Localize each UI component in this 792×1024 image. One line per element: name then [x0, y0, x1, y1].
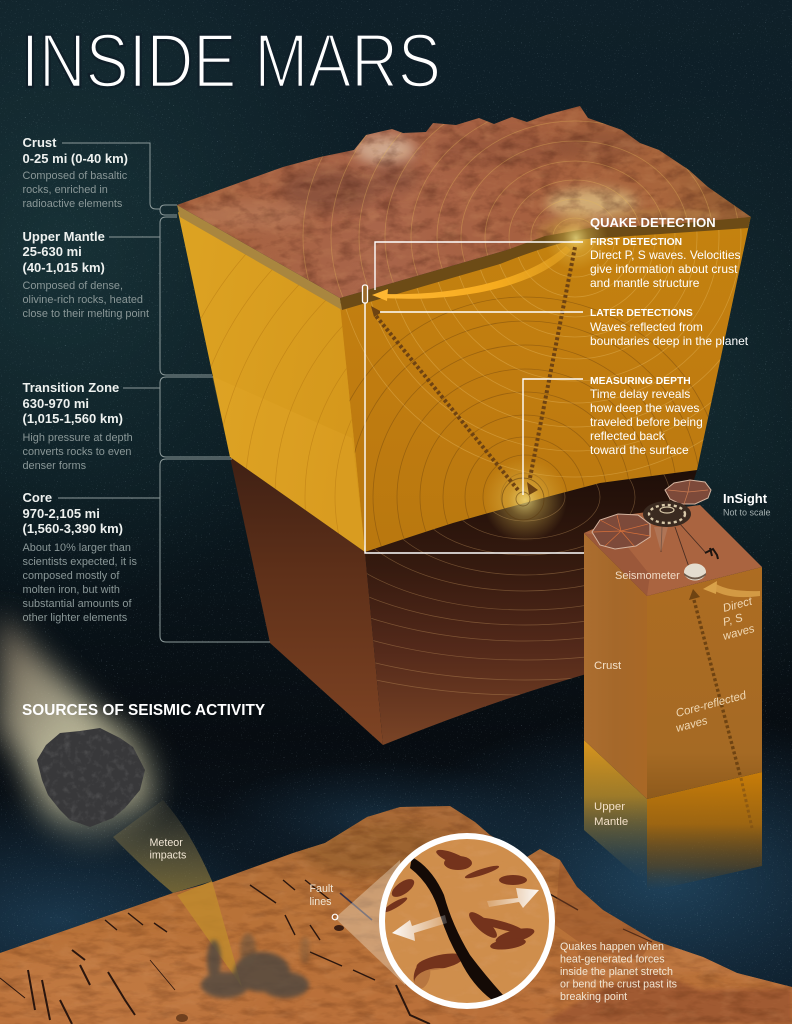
quake explanation text: or bend the crust past its	[560, 978, 677, 990]
title: INSIDE MARS	[21, 19, 441, 104]
transition zone label	[22, 377, 230, 472]
quake detection text: how deep the waves	[590, 401, 699, 415]
quake detection text: Waves reflected from	[590, 320, 703, 334]
upper mantle label: olivine-rich rocks, heated	[22, 294, 143, 306]
core label: Core	[22, 490, 52, 505]
core label: About 10% larger than	[22, 542, 131, 554]
white callout lines	[362, 242, 584, 553]
column: top surface	[584, 505, 762, 596]
column labels: Upper	[594, 801, 625, 813]
column: crust left face	[584, 533, 647, 799]
InSight labels	[723, 491, 771, 518]
dotted wave path: reflected	[376, 316, 518, 490]
column labels: P, S	[722, 612, 745, 629]
quake detection text: LATER DETECTIONS	[590, 308, 693, 319]
quake detection text: give information about crust	[590, 262, 738, 276]
core: left face	[230, 457, 383, 745]
quake explanation text: Quakes happen when	[560, 941, 664, 953]
direct wave arrow in column	[713, 584, 760, 597]
meteor light beam above horizon	[113, 800, 212, 893]
InSight lander	[592, 480, 718, 580]
quake explanation text: breaking point	[560, 991, 627, 1003]
quake detection text: Time delay reveals	[590, 387, 690, 401]
orange direct wave arrow	[372, 246, 571, 301]
front solar panel	[592, 514, 650, 549]
upper mantle label: (40-1,015 km)	[22, 260, 105, 275]
column labels: Direct	[722, 595, 754, 615]
fault lines label: lines	[310, 896, 331, 908]
dotted wave path: direct upward	[530, 247, 575, 478]
dotted core-reflected wave	[694, 600, 752, 828]
meteor trail glow	[0, 610, 158, 842]
lander deck	[643, 501, 706, 570]
quake detection text: boundaries deep in the planet	[590, 334, 749, 348]
label: meteor impacts: impacts	[150, 850, 186, 862]
label: meteor impacts	[150, 837, 186, 862]
layer callouts at left	[22, 135, 270, 642]
crust label: Composed of basaltic	[22, 170, 128, 182]
transition zone label: Transition Zone	[22, 380, 119, 395]
core label	[22, 459, 270, 642]
transition zone label: High pressure at depth	[22, 432, 133, 444]
column labels: waves	[675, 715, 709, 735]
magnifier close-up of fault	[380, 835, 555, 1007]
crust band: right side	[340, 217, 751, 310]
column labels: Core-reflected	[675, 689, 748, 720]
crust band: left side	[177, 205, 342, 310]
column labels: waves	[722, 623, 756, 643]
foothill shading right	[555, 860, 653, 960]
core label: composed mostly of	[22, 570, 120, 582]
quake detection text: traveled before being	[590, 415, 703, 429]
core label: substantial amounts of	[22, 598, 132, 610]
core label: (1,560-3,390 km)	[22, 521, 123, 536]
mantle: right face	[340, 221, 750, 552]
crust label	[22, 135, 177, 215]
upper mantle label: close to their melting point	[22, 308, 149, 320]
transition zone label: converts rocks to even	[22, 446, 131, 458]
heading: sources of seismic activity: SOURCES OF SEISMIC ACTIVITY	[22, 702, 266, 719]
magnifier beam to fault	[335, 860, 405, 985]
upper mantle label: Upper Mantle	[22, 229, 105, 244]
Mars surface with fault lines	[0, 800, 792, 1024]
column labels	[594, 570, 756, 828]
core: right face	[366, 470, 697, 745]
quake detection text: MEASURING DEPTH	[590, 376, 691, 387]
mantle: left face	[178, 212, 364, 552]
InSight labels: InSight	[723, 491, 768, 506]
quake detection text: QUAKE DETECTION	[590, 215, 716, 230]
epicentre glow on core boundary	[483, 458, 567, 542]
core label: other lighter elements	[22, 612, 128, 624]
main cutaway block of Mars	[135, 0, 792, 867]
rings around deep quake	[502, 478, 544, 520]
seismometer dome	[684, 564, 706, 580]
crust label: radioactive elements	[22, 198, 123, 210]
quake detection text: FIRST DETECTION	[590, 237, 682, 248]
surface terrain	[177, 106, 751, 298]
transition zone label: 630-970 mi	[22, 396, 89, 411]
fault lines label	[310, 883, 338, 920]
InSight labels: Not to scale	[723, 508, 771, 518]
quake explanation text: inside the planet stretch	[560, 966, 673, 978]
upper mantle label: 25-630 mi	[22, 244, 82, 259]
core label: 970-2,105 mi	[22, 506, 100, 521]
transition zone label: (1,015-1,560 km)	[22, 411, 123, 426]
column labels: Crust	[594, 660, 622, 672]
column: crust right face	[647, 567, 762, 799]
back solar panel	[665, 480, 711, 504]
crust label: 0-25 mi (0-40 km)	[22, 151, 128, 166]
quake explanation text: heat-generated forces	[560, 954, 665, 966]
surface glow	[544, 206, 608, 270]
core label: scientists expected, it is	[22, 556, 137, 568]
quake detection text: reflected back	[590, 429, 666, 443]
arrowhead in column	[689, 589, 700, 600]
core label: molten iron, but with	[22, 584, 120, 596]
arrow: crust pulled right	[487, 888, 539, 908]
column labels: Seismometer	[615, 570, 680, 582]
meteor beam over terrain	[177, 881, 242, 987]
label: meteor impacts: Meteor	[150, 837, 183, 849]
fault lines label: Fault	[310, 883, 333, 895]
crust label: rocks, enriched in	[22, 184, 108, 196]
quake detection text	[590, 215, 749, 457]
quake detection text: toward the surface	[590, 443, 689, 457]
meteor rock	[37, 728, 145, 827]
arrowhead: deep wave	[527, 482, 538, 495]
InSight crust column	[584, 505, 762, 892]
arrow: crust pulled left	[392, 915, 447, 941]
column: upper mantle right face	[647, 772, 762, 892]
upper mantle label	[22, 217, 212, 375]
quake detection text: and mantle structure	[590, 276, 700, 290]
transition zone label: denser forms	[22, 460, 87, 472]
robotic arm instrument	[705, 548, 718, 559]
quake detection text: Direct P, S waves. Velocities	[590, 248, 741, 262]
arrowhead: reflected wave	[371, 306, 382, 317]
column: upper mantle left face	[584, 740, 647, 885]
crust label: Crust	[22, 135, 57, 150]
column labels: Mantle	[594, 816, 628, 828]
impact dust cloud	[201, 933, 310, 998]
upper mantle label: Composed of dense,	[22, 280, 123, 292]
quake explanation text	[560, 941, 677, 1003]
